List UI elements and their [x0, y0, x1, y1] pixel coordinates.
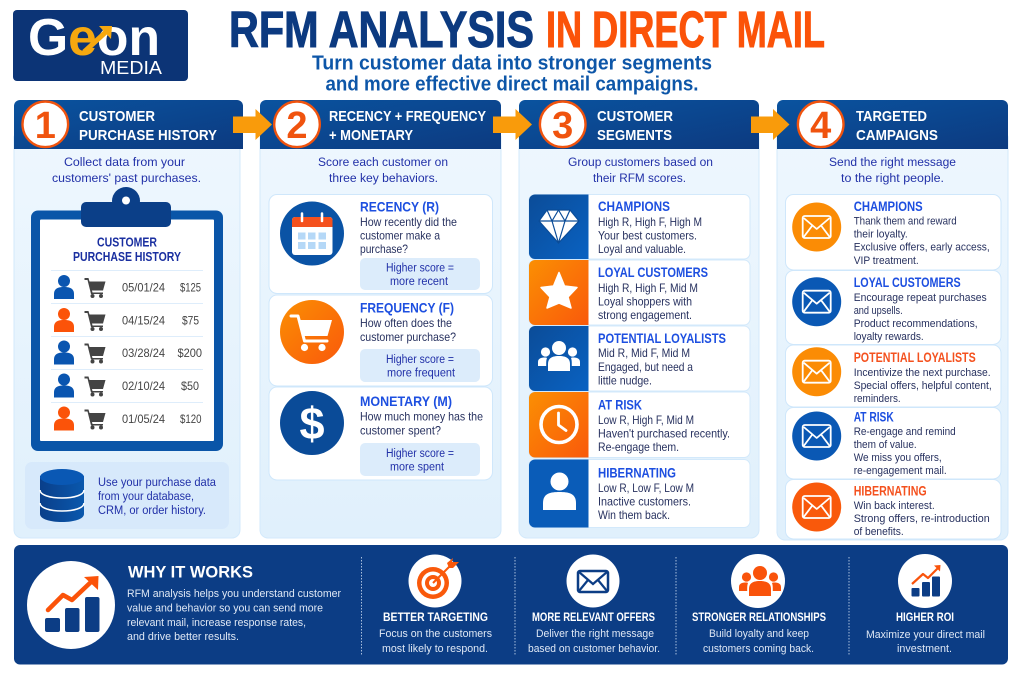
step 1 header: 1	[35, 105, 56, 147]
icon: red-orange envelope	[792, 482, 841, 532]
benefit: better targeting: BETTER TARGETING	[383, 610, 488, 624]
icon: target	[408, 554, 462, 608]
arrow: step 2 to step 3	[493, 109, 532, 140]
row 02/10/24	[54, 374, 199, 398]
step 3 intro text: their RFM scores.	[593, 171, 686, 185]
clipboard: customer purchase history	[31, 187, 223, 451]
callout: higher score more recent	[360, 258, 480, 290]
campaign: potential loyalists: reminders.	[854, 393, 901, 405]
campaign: champions: VIP treatment.	[854, 255, 919, 267]
benefit: higher roi: investment.	[897, 643, 952, 655]
benefit: more relevant offers: Deliver the right message	[536, 628, 654, 640]
logo: Geon Media: MEDIA	[100, 58, 162, 78]
icon: calendar	[280, 202, 344, 266]
row 03/28/24: 03/28/24	[122, 346, 165, 360]
why it works text: RFM analysis helps you understand customer	[127, 588, 341, 600]
segment: hibernating: Inactive customers.	[598, 496, 691, 508]
benefit: higher roi: Maximize your direct mail	[866, 629, 985, 641]
segment: champions: Your best customers.	[598, 230, 697, 242]
benefit: stronger relationships: customers coming back.	[703, 643, 814, 655]
why it works text: WHY IT WORKS	[128, 562, 253, 582]
segment: loyal customers: High R, High F, Mid M	[598, 282, 698, 295]
row 04/15/24	[54, 308, 199, 332]
step 1 intro text: customers' past purchases.	[52, 171, 201, 185]
panel: why it works	[14, 545, 1008, 664]
step 4 intro text: Send the right message	[829, 155, 956, 169]
step 3 intro text	[568, 155, 713, 185]
segment: loyal customers: Loyal shoppers with	[598, 296, 692, 308]
segment: at risk: AT RISK	[598, 396, 642, 412]
benefit: more relevant offers	[528, 554, 660, 655]
campaign: champions: Thank them and reward	[854, 216, 957, 228]
logo: Geon Media	[13, 9, 188, 81]
clipboard: customer purchase history: PURCHASE HISTORY	[73, 250, 182, 264]
campaign: at risk: them of value.	[854, 439, 917, 451]
segment: potential loyalists: Mid R, Mid F, Mid M	[598, 347, 690, 360]
step 4 intro text: to the right people.	[841, 171, 944, 185]
campaign: champions: their loyalty.	[854, 228, 908, 240]
row 03/28/24	[54, 340, 202, 364]
segment: champions: CHAMPIONS	[598, 198, 670, 214]
segment: loyal customers	[529, 260, 750, 325]
callout: higher score more spent: Higher score =	[386, 446, 454, 460]
segment: potential loyalists: little nudge.	[598, 374, 652, 388]
panel: step 3 customer segments	[519, 100, 759, 538]
step 2 header: RECENCY + FREQUENCY	[329, 108, 486, 125]
segment: hibernating	[529, 460, 750, 528]
campaign: hibernating: of benefits.	[854, 526, 904, 538]
campaign: hibernating	[786, 480, 1001, 539]
card: frequency: How often does the	[360, 317, 452, 330]
callout: higher score more frequent: Higher score =	[386, 352, 454, 366]
icon: group	[538, 341, 580, 371]
segment: at risk: Re-engage them.	[598, 441, 679, 454]
row 05/01/24	[54, 275, 201, 299]
arrow: step 3 to step 4	[751, 109, 790, 140]
step 4 intro text	[829, 155, 956, 185]
campaign: potential loyalists: Incentivize the next purchase.	[854, 367, 991, 379]
segment: hibernating: HIBERNATING	[598, 464, 676, 480]
step 2 header: 2	[286, 105, 308, 147]
arrow: step 1 to step 2	[233, 109, 272, 140]
step 1 intro text: Collect data from your	[64, 155, 185, 169]
icon: diamond	[539, 210, 579, 243]
benefit: more relevant offers: MORE RELEVANT OFFERS	[532, 610, 655, 624]
title: RFM ANALYSIS	[229, 1, 534, 58]
icon: person	[543, 472, 576, 510]
campaign: loyal customers: Encourage repeat purchases	[854, 292, 987, 304]
callout: higher score more recent: Higher score =	[386, 260, 454, 274]
campaign: loyal customers: LOYAL CUSTOMERS	[854, 275, 961, 290]
benefit: stronger relationships	[692, 554, 826, 655]
segment: loyal customers: strong engagement.	[598, 309, 692, 322]
row 03/28/24: $200	[178, 346, 202, 360]
segment: hibernating: Low R, Low F, Low M	[598, 482, 694, 495]
campaign: loyal customers: and upsells.	[854, 305, 903, 317]
panel: step 2 recency frequency monetary	[260, 100, 501, 538]
segment: potential loyalists	[529, 326, 750, 391]
panel: step 1 customer purchase history	[14, 100, 243, 538]
segment: potential loyalists: POTENTIAL LOYALISTS	[598, 330, 726, 346]
panel: step 4 targeted campaigns	[777, 100, 1008, 540]
segment: loyal customers: LOYAL CUSTOMERS	[598, 264, 708, 280]
segment: champions: High R, High F, High M	[598, 216, 702, 229]
card: recency: RECENCY (R)	[360, 198, 439, 214]
campaign: loyal customers: loyalty rewards.	[854, 331, 924, 343]
callout: higher score more frequent: more frequent	[387, 366, 456, 380]
database callout: CRM, or order history.	[98, 503, 206, 517]
step 4 header: CAMPAIGNS	[856, 127, 938, 144]
benefit: more relevant offers: based on customer behavior.	[528, 643, 660, 655]
row 02/10/24: $50	[181, 379, 199, 393]
card: frequency: customer purchase?	[360, 331, 456, 344]
card: recency	[269, 194, 492, 294]
step 1 header: CUSTOMER	[79, 108, 155, 125]
logo: Geon Media: Geon	[28, 9, 160, 67]
icon: orange envelope	[792, 347, 841, 396]
row 04/15/24: 04/15/24	[122, 314, 165, 328]
campaign: loyal customers	[786, 270, 1001, 344]
card: frequency: FREQUENCY (F)	[360, 300, 454, 316]
row 02/10/24: 02/10/24	[122, 379, 165, 393]
step 2 header	[260, 100, 501, 149]
step 4 header: TARGETED	[856, 108, 927, 125]
callout: higher score more spent: more spent	[390, 460, 445, 474]
step 4 header: 4	[810, 105, 831, 147]
icon: dollar	[280, 391, 344, 455]
benefit: better targeting: most likely to respond.	[382, 643, 488, 655]
campaign: potential loyalists: Special offers, helpful content,	[854, 380, 992, 392]
subtitle: Turn customer data into stronger segments	[312, 52, 712, 74]
benefit: higher roi	[866, 554, 985, 655]
subtitle: and more effective direct mail campaigns.	[326, 74, 698, 96]
icon: clock	[541, 406, 577, 442]
icon: roi chart	[898, 554, 952, 608]
card: monetary	[269, 387, 492, 480]
step 3 header: CUSTOMER	[597, 108, 673, 125]
icon: database	[40, 469, 84, 522]
campaign: at risk: Re-engage and remind	[854, 426, 956, 438]
why it works text	[127, 562, 341, 643]
campaign: at risk: re-engagement mail.	[854, 465, 947, 477]
why it works text: value and behavior so you can send more	[127, 602, 323, 614]
step 1 header: PURCHASE HISTORY	[79, 127, 217, 144]
title	[229, 1, 825, 58]
row 05/01/24: 05/01/24	[122, 280, 165, 294]
icon: orange envelope	[792, 202, 841, 252]
campaign: potential loyalists: POTENTIAL LOYALISTS	[854, 350, 976, 365]
icon: blue envelope	[792, 412, 841, 460]
segment: champions: Loyal and valuable.	[598, 243, 686, 256]
campaign: champions: Exclusive offers, early access,	[854, 242, 990, 254]
segment: at risk: Low R, High F, Mid M	[598, 414, 694, 427]
campaign: loyal customers: Product recommendations,	[854, 318, 978, 330]
step 3 header: 3	[552, 105, 573, 147]
icon: growth chart	[27, 561, 115, 649]
campaign: champions: CHAMPIONS	[854, 199, 923, 214]
step 3 header: SEGMENTS	[597, 127, 672, 144]
benefit: better targeting	[379, 554, 492, 655]
segment: champions	[529, 194, 750, 259]
subtitle	[312, 52, 712, 96]
database callout: from your database,	[98, 489, 194, 503]
card: recency: How recently did the	[360, 216, 457, 229]
card: frequency	[269, 295, 492, 386]
row 05/01/24: $125	[180, 280, 201, 294]
title: IN DIRECT MAIL	[546, 1, 825, 58]
icon: envelope	[566, 554, 620, 608]
database callout	[25, 462, 229, 529]
segment: potential loyalists: Engaged, but need a	[598, 361, 693, 374]
step 4 header	[777, 100, 1008, 149]
row 04/15/24: $75	[182, 314, 199, 328]
row 01/05/24: $120	[180, 412, 202, 426]
campaign: hibernating: Win back interest.	[854, 500, 935, 512]
segment: at risk	[529, 392, 750, 458]
icon: blue envelope	[792, 277, 841, 326]
step 3 header	[519, 100, 759, 149]
icon: star	[541, 272, 577, 308]
benefit: stronger relationships: Build loyalty and keep	[709, 628, 809, 640]
row 01/05/24	[54, 406, 202, 430]
campaign: at risk: AT RISK	[854, 410, 894, 424]
card: monetary: MONETARY (M)	[360, 393, 452, 409]
segment: hibernating: Win them back.	[598, 509, 670, 522]
step 2 intro text: Score each customer on	[318, 155, 448, 169]
step 2 intro text: three key behaviors.	[329, 171, 438, 185]
row 01/05/24: 01/05/24	[122, 412, 165, 426]
card: monetary: customer spent?	[360, 424, 442, 438]
icon: dollar: $	[299, 398, 325, 449]
benefit: higher roi: HIGHER ROI	[896, 610, 954, 624]
step 1 header	[14, 100, 243, 149]
segment: at risk: Haven't purchased recently.	[598, 428, 730, 440]
step 2 intro text	[318, 155, 448, 185]
icon: shopping cart	[280, 300, 344, 364]
campaign: hibernating: HIBERNATING	[854, 484, 927, 498]
benefit: better targeting: Focus on the customers	[379, 628, 492, 640]
step 2 header: + MONETARY	[329, 127, 413, 144]
card: recency: purchase?	[360, 243, 408, 256]
card: monetary: How much money has the	[360, 410, 483, 424]
campaign: at risk: We miss you offers,	[854, 452, 942, 464]
campaign: hibernating: Strong offers, re-introduction	[854, 513, 990, 525]
benefit: stronger relationships: STRONGER RELATIONSHIPS	[692, 610, 826, 624]
step 3 intro text: Group customers based on	[568, 155, 713, 169]
callout: higher score more recent: more recent	[390, 274, 449, 288]
callout: higher score more frequent	[360, 349, 480, 382]
card: recency: customer make a	[360, 230, 440, 242]
campaign: at risk	[786, 408, 1001, 479]
step 1 intro text	[52, 155, 201, 185]
callout: higher score more spent	[360, 443, 480, 476]
campaign: champions	[786, 194, 1001, 270]
icon: people group	[731, 554, 785, 608]
why it works text: relevant mail, increase response rates,	[127, 617, 306, 629]
why it works text: and drive better results.	[127, 631, 239, 643]
database callout: Use your purchase data	[98, 475, 216, 489]
clipboard: customer purchase history: CUSTOMER	[97, 236, 157, 250]
campaign: potential loyalists	[786, 345, 1001, 407]
